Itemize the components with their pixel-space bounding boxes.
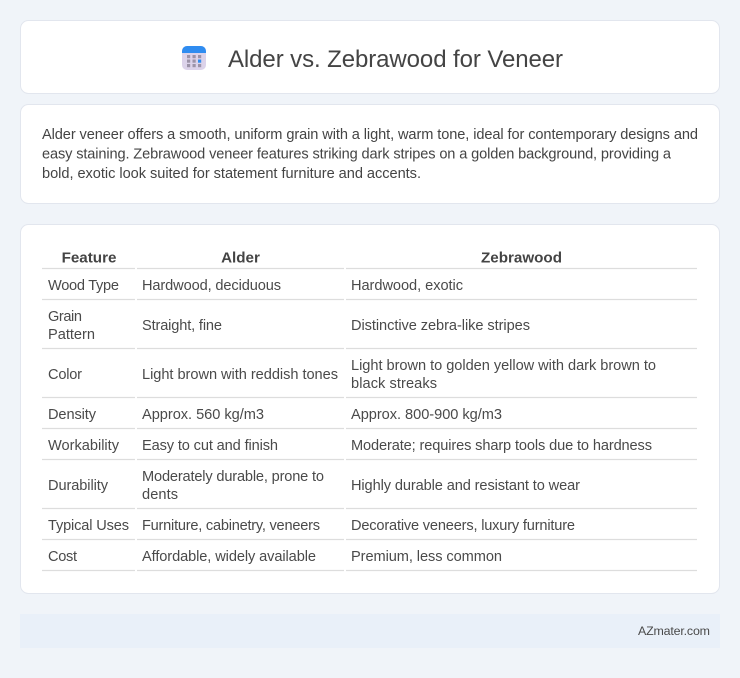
row: color: Color <box>48 367 82 383</box>
row: workability: Easy to cut and finish <box>142 438 278 454</box>
table header: Alder <box>221 250 260 266</box>
row: color <box>48 358 656 392</box>
row: grain pattern <box>48 309 530 343</box>
row: grain pattern: Straight, fine <box>142 318 222 334</box>
row: durability: Highly durable and resistant to wear <box>351 478 580 494</box>
row: durability: Moderately durable, prone to <box>142 469 324 485</box>
row: typical uses: Decorative veneers, luxury furniture <box>351 518 575 534</box>
row: wood type: Hardwood, exotic <box>351 278 463 294</box>
footer <box>20 614 720 648</box>
row: grain pattern: Distinctive zebra-like stripes <box>351 318 530 334</box>
row: workability <box>48 438 652 454</box>
row: density: Density <box>48 407 97 423</box>
intro text: Alder veneer offers a smooth, uniform grain with a light, warm tone, ideal for contemporary designs and <box>42 127 698 143</box>
row: typical uses <box>48 518 575 534</box>
row: wood type <box>48 278 463 294</box>
row: typical uses: Typical Uses <box>48 518 129 534</box>
row: workability: Workability <box>48 438 120 454</box>
intro text <box>42 127 698 182</box>
row: density <box>48 407 502 423</box>
row: wood type: Hardwood, deciduous <box>142 278 281 294</box>
row: grain pattern: Pattern <box>48 327 95 343</box>
row: cost: Premium, less common <box>351 549 502 565</box>
table header: Zebrawood <box>481 250 562 266</box>
table header: Feature <box>62 250 116 266</box>
row: color: Light brown with reddish tones <box>142 367 338 383</box>
row: durability <box>48 469 580 503</box>
intro text: bold, exotic look suited for statement furniture and accents. <box>42 166 421 182</box>
row: color: Light brown to golden yellow with dark brown to <box>351 358 656 374</box>
row: cost <box>48 549 502 565</box>
panel: title header <box>20 20 720 94</box>
row: wood type: Wood Type <box>48 278 119 294</box>
row: durability: dents <box>142 487 178 503</box>
row: density: Approx. 800-900 kg/m3 <box>351 407 502 423</box>
panel: comparison table <box>20 224 720 594</box>
row: color: black streaks <box>351 376 437 392</box>
intro text: easy staining. Zebrawood veneer features striking dark stripes on a golden background, providing a <box>42 146 672 162</box>
title: Alder vs. Zebrawood for Veneer <box>228 46 563 73</box>
row: density: Approx. 560 kg/m3 <box>142 407 264 423</box>
panel: introduction <box>20 104 720 204</box>
row: typical uses: Furniture, cabinetry, veneers <box>142 518 320 534</box>
row: workability: Moderate; requires sharp tools due to hardness <box>351 438 652 454</box>
row: cost: Cost <box>48 549 77 565</box>
footer credit: AZmater.com <box>638 624 710 638</box>
row: grain pattern: Grain <box>48 309 82 325</box>
row: cost: Affordable, widely available <box>142 549 316 565</box>
icon: calendar <box>182 46 206 70</box>
table header <box>62 250 562 266</box>
row: durability: Durability <box>48 478 109 494</box>
